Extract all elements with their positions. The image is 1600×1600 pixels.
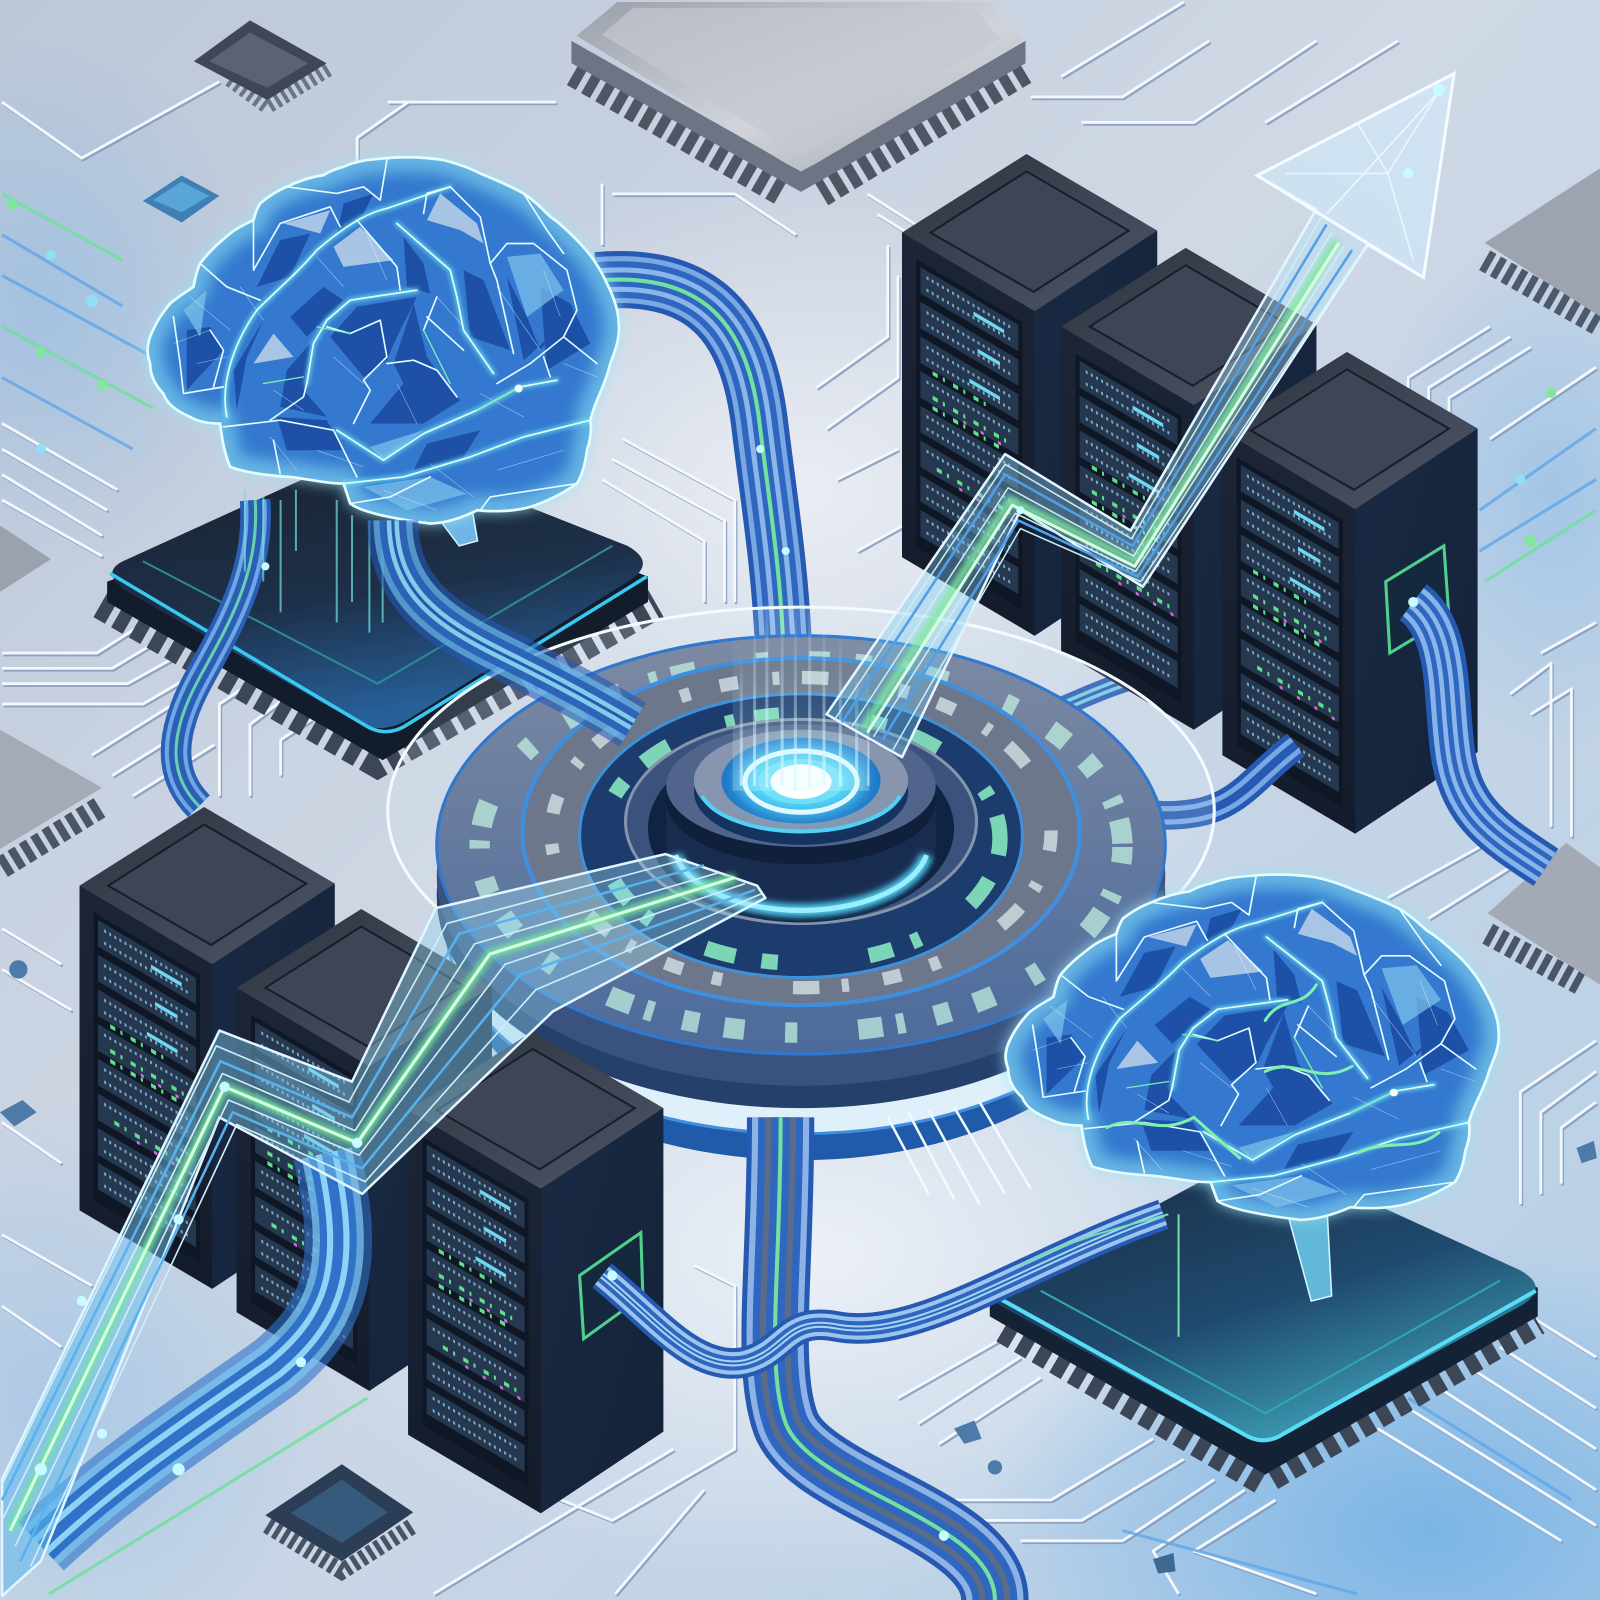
brain stem <box>429 505 478 546</box>
cable: left platform bundle <box>176 500 256 806</box>
chip right edge top <box>1485 168 1600 324</box>
platform chip under right brain <box>990 1153 1538 1478</box>
disc base plates <box>437 665 1165 1160</box>
central disc hub <box>437 594 1165 1160</box>
fan of thin lines under disc <box>888 1102 1031 1204</box>
stacked hub <box>626 719 977 923</box>
lower left data arrow <box>2 854 765 1596</box>
server racks upper right <box>902 154 1478 834</box>
light beams <box>733 594 869 791</box>
port on rack with green frame <box>580 1233 643 1339</box>
chip bottom <box>265 1464 413 1571</box>
port on rack with green frame <box>1386 546 1449 653</box>
glowing core <box>721 738 881 823</box>
top processor chip <box>571 2 1026 194</box>
right neural brain <box>1006 875 1499 1301</box>
platform wires below right brain <box>1020 1214 1179 1337</box>
inner dark glyph band <box>580 694 1022 978</box>
cable: rack to lower right <box>1413 602 1546 867</box>
middle glyph band <box>522 658 1080 1005</box>
cable: lower left bundle <box>41 1153 338 1546</box>
upper right rising arrow <box>827 73 1454 757</box>
brain body <box>1006 875 1499 1220</box>
brain body <box>148 157 619 524</box>
cable: brain to hub <box>597 280 784 653</box>
green highlights <box>1107 985 1439 1158</box>
outer glyph band <box>437 636 1165 1054</box>
left neural brain <box>148 157 619 546</box>
cable: rack to right brain <box>602 1214 1163 1363</box>
small components <box>0 960 1597 1573</box>
platform chip under left brain <box>102 454 655 760</box>
server racks lower left <box>80 807 663 1513</box>
cable: rack to disc <box>1138 745 1296 815</box>
chip left edge <box>0 526 102 867</box>
chip right middle <box>1488 843 1600 985</box>
data nodes <box>7 199 1556 547</box>
cable: center downward <box>775 1117 995 1600</box>
brain stem <box>1284 1199 1332 1301</box>
cable: left brain to platform <box>393 520 633 724</box>
wires below left brain <box>245 490 383 633</box>
cable: rack to hub small <box>1056 673 1153 709</box>
small blue chip <box>143 176 219 222</box>
outer halo ring <box>388 607 1214 1015</box>
small chip top left <box>194 20 329 107</box>
